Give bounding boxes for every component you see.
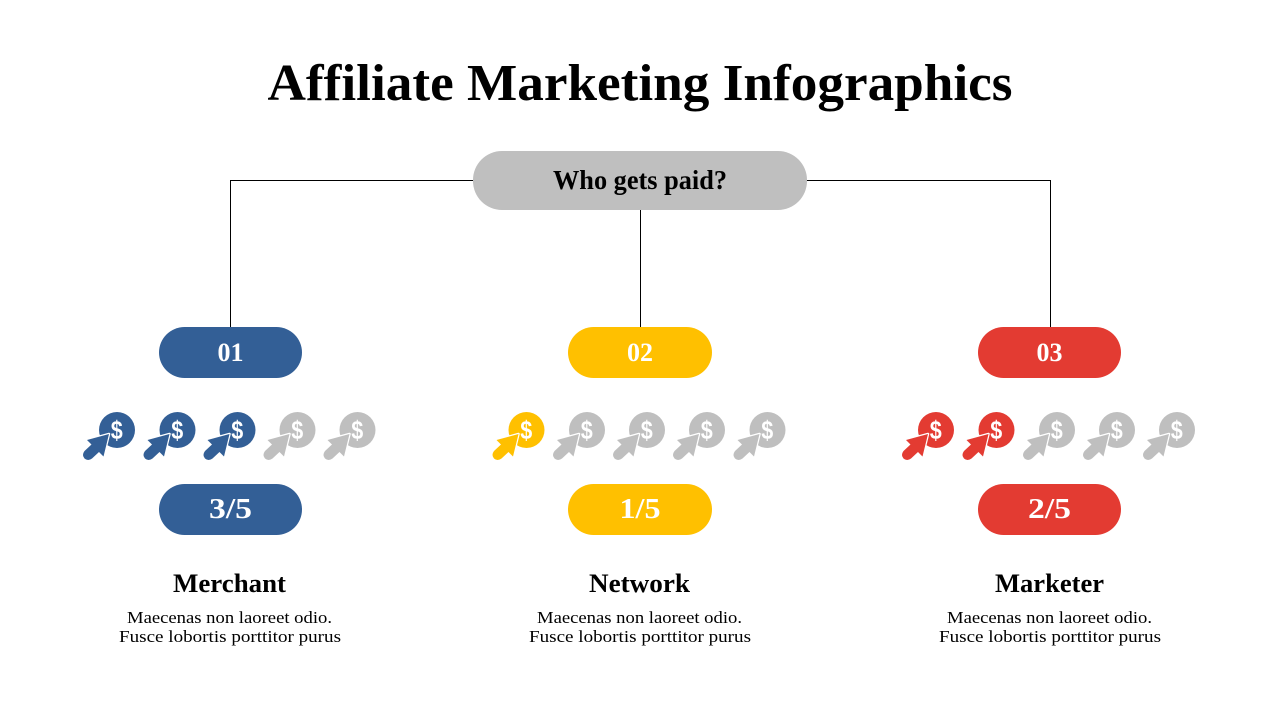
panel: merchant <box>83 327 376 646</box>
description: network <box>529 608 751 646</box>
icon row: 3 of 5 blue: $ <box>351 415 364 445</box>
number pill 02 <box>568 327 712 378</box>
number pill 01: 01 <box>218 338 244 367</box>
description: merchant: Fusce lobortis porttitor purus <box>119 627 341 646</box>
icon row: 1 of 5 yellow: $ <box>581 415 593 445</box>
number pill 03: 03 <box>1036 338 1062 367</box>
icon row: 2 of 5 red <box>902 412 1195 460</box>
heading: marketer: Marketer <box>995 569 1104 598</box>
heading: network: Network <box>589 569 691 598</box>
score pill 3/5: 3/5 <box>209 494 252 525</box>
heading: merchant: Merchant <box>173 569 286 598</box>
title: Affiliate Marketing Infographics <box>268 55 1012 112</box>
score pill 2/5 <box>978 484 1121 535</box>
description: merchant: Maecenas non laoreet odio. <box>127 608 332 627</box>
icon row: 3 of 5 blue: $ <box>231 415 244 445</box>
description: merchant <box>119 608 341 646</box>
icon row: 2 of 5 red: $ <box>1171 415 1183 445</box>
icon row: 1 of 5 yellow: $ <box>761 415 774 445</box>
score pill 2/5: 2/5 <box>1028 494 1071 525</box>
score pill 3/5 <box>159 484 302 535</box>
icon row: 2 of 5 red: $ <box>1051 415 1063 445</box>
icon row: 1 of 5 yellow: $ <box>701 415 713 445</box>
icon row: 1 of 5 yellow: $ <box>641 415 653 445</box>
icon row: 2 of 5 red: $ <box>1111 415 1123 445</box>
description: marketer: Fusce lobortis porttitor purus <box>939 627 1161 646</box>
number pill 03 <box>978 327 1121 378</box>
icon row: 3 of 5 blue: $ <box>291 415 304 445</box>
panel: marketer <box>902 327 1195 646</box>
description: network: Fusce lobortis porttitor purus <box>529 627 751 646</box>
connector lines <box>230 180 1050 327</box>
number pill 01 <box>159 327 302 378</box>
description: marketer <box>939 608 1161 646</box>
score pill 1/5: 1/5 <box>620 494 660 525</box>
icon row: 1 of 5 yellow: $ <box>520 415 533 445</box>
score pill 1/5 <box>568 484 712 535</box>
description: marketer: Maecenas non laoreet odio. <box>947 608 1152 627</box>
panel: network <box>492 327 786 646</box>
icon row: 2 of 5 red: $ <box>990 415 1003 445</box>
icon row: 1 of 5 yellow <box>492 412 786 460</box>
icon row: 2 of 5 red: $ <box>930 415 942 445</box>
icon row: 3 of 5 blue <box>83 412 376 460</box>
root pill: who gets paid: Who gets paid? <box>553 165 727 195</box>
icon row: 3 of 5 blue: $ <box>111 415 123 445</box>
icon row: 3 of 5 blue: $ <box>171 415 184 445</box>
root pill: who gets paid <box>473 151 807 210</box>
number pill 02: 02 <box>627 338 653 367</box>
description: network: Maecenas non laoreet odio. <box>537 608 742 627</box>
